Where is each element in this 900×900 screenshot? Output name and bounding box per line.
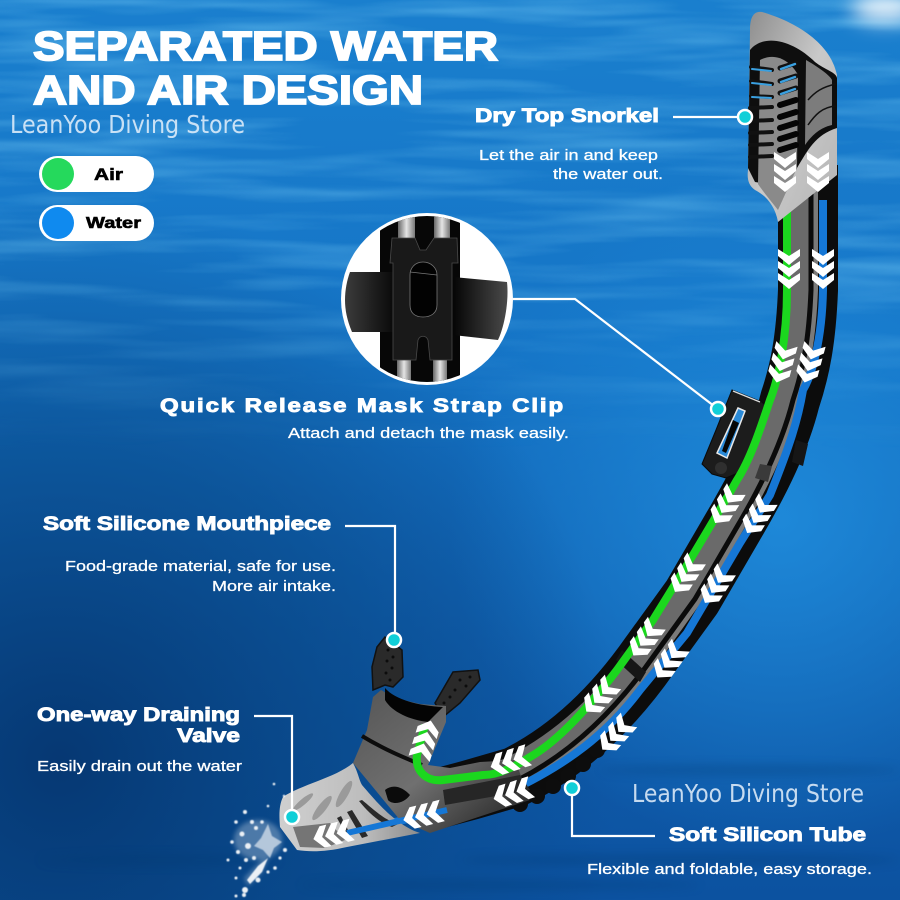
callout: soft silicone mouthpiece: Soft Silicone Mouthpiece: [43, 514, 331, 535]
callout: one-way draining valve: One-way Draining: [37, 705, 240, 726]
callout: dry top snorkel: Dry Top Snorkel: [475, 106, 659, 127]
callout: one-way draining valve: [37, 705, 299, 824]
title: AND AIR DESIGN: [33, 67, 423, 113]
callout: one-way draining valve: Valve: [177, 726, 240, 747]
legend: [39, 156, 154, 241]
water channel (blue): [347, 200, 823, 833]
callout: dry top snorkel: [475, 106, 752, 183]
one-way drain valve: [279, 763, 420, 851]
callout: quick release mask strap clip: Attach and detach the mask easily.: [288, 425, 569, 442]
callout: dry top snorkel: Let the air in and keep: [479, 147, 658, 164]
snorkel: [279, 12, 837, 851]
title: SEPARATED WATER: [33, 23, 498, 69]
legend: air: Air: [94, 165, 123, 184]
water splash: [226, 783, 287, 898]
flow chevrons: [311, 152, 834, 850]
legend: water: Water: [86, 215, 141, 232]
snorkel: corrugated lower tube ridges: [512, 712, 630, 812]
strap clip on tube: [702, 390, 770, 478]
mouthpiece lugs: [372, 637, 480, 717]
air slots: [750, 63, 796, 157]
watermark top: LeanYoo Diving Store: [10, 110, 245, 139]
dry top head: [748, 12, 837, 222]
callout: soft silicon tube: [565, 781, 872, 878]
callout: quick release mask strap clip: Quick Release Mask Strap Clip: [160, 396, 565, 417]
callout: soft silicone mouthpiece: [43, 514, 401, 647]
callout: soft silicon tube: Soft Silicon Tube: [669, 825, 866, 846]
snorkel: outer tube: [425, 165, 816, 809]
tube collars: [616, 440, 808, 682]
callout: soft silicone mouthpiece: More air intake.: [212, 578, 336, 595]
inset: mask strap clip detail: [341, 213, 513, 386]
title: [33, 23, 498, 113]
callout: one-way draining valve: Easily drain out the water: [37, 758, 242, 775]
mouthpiece neck and body: [353, 688, 530, 833]
callout: soft silicone mouthpiece: Food-grade material, safe for use.: [65, 558, 336, 575]
callout: soft silicon tube: Flexible and foldable, easy storage.: [587, 861, 872, 878]
blue channel through valve: [347, 810, 447, 833]
air channel (green): [417, 205, 787, 780]
callout: dry top snorkel: the water out.: [553, 166, 663, 183]
watermark bottom: LeanYoo Diving Store: [632, 779, 864, 808]
callout: quick release mask strap clip: [160, 299, 725, 442]
